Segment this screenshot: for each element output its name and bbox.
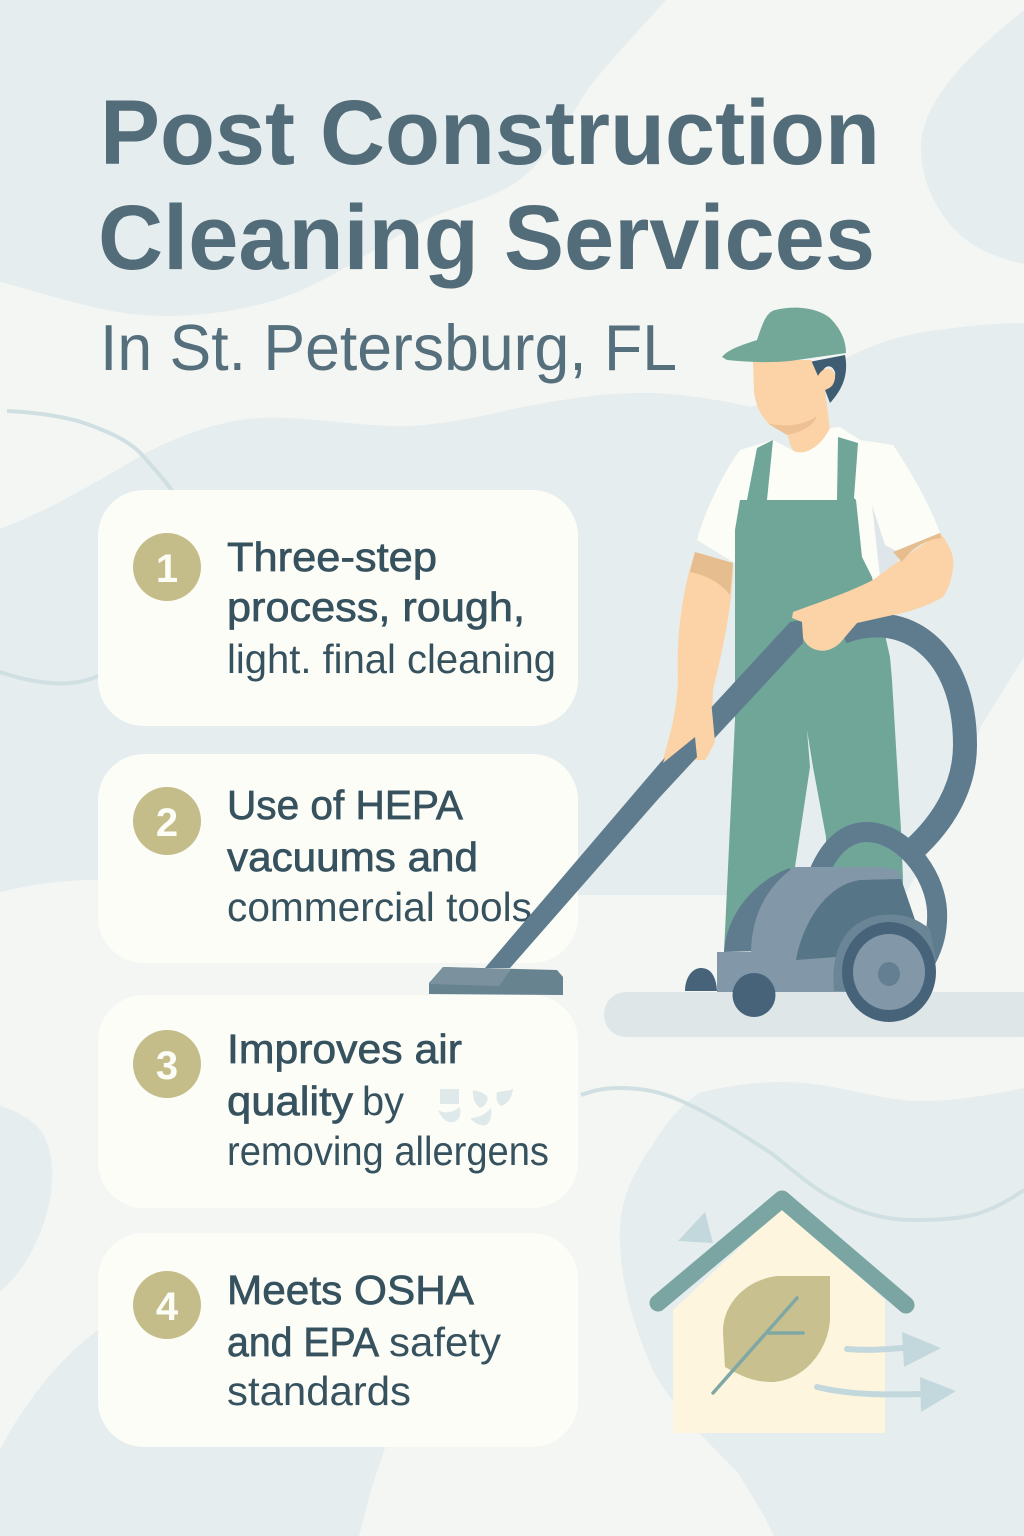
title: Cleaning Services <box>98 187 875 289</box>
illustration: house with leaf <box>658 1199 956 1433</box>
badge 4 <box>133 1271 201 1339</box>
overalls <box>724 437 903 952</box>
cap-wearing head <box>722 308 846 455</box>
text: step 1 <box>227 534 556 682</box>
text: step 1: light. final cleaning <box>227 636 556 682</box>
right arm and hand <box>792 533 953 651</box>
main wheel <box>842 922 936 1022</box>
panel: step 2 <box>98 754 578 963</box>
air arrow upper <box>847 1332 941 1367</box>
badge 1 <box>133 533 201 601</box>
panel: step 1 <box>98 490 578 726</box>
text: step 3: by <box>362 1078 404 1124</box>
house body <box>673 1208 885 1433</box>
roof <box>658 1199 906 1305</box>
title <box>98 82 880 289</box>
panel: step 3 <box>98 995 578 1208</box>
text: step 4 <box>227 1267 502 1414</box>
rear wheels <box>685 968 776 1017</box>
text: step 3: quality <box>227 1078 354 1124</box>
text: step 2: Use of HEPA <box>227 782 464 828</box>
panel: step 4 <box>98 1233 578 1447</box>
vacuum body <box>717 832 937 992</box>
text: step 4: Meets OSHA <box>227 1267 475 1313</box>
floor <box>604 992 1024 1037</box>
text: step 4: safety <box>389 1319 502 1365</box>
text: step 4: and EPA <box>227 1319 380 1365</box>
illustration: worker with vacuum <box>429 308 965 1022</box>
title: Post Construction <box>100 82 880 184</box>
text: step 1: process, rough, <box>227 584 525 630</box>
text: step 2: vacuums and <box>227 834 478 880</box>
text: step 2: commercial tools <box>227 884 532 930</box>
text: step 3 <box>227 1026 549 1174</box>
fingers over wand <box>663 700 715 763</box>
leaf <box>713 1276 830 1393</box>
vacuum hose <box>842 625 965 848</box>
badge 4: 4 <box>156 1285 179 1329</box>
vacuum floor head <box>429 967 563 995</box>
icon: faded leaves <box>438 1089 513 1125</box>
badge 1: 1 <box>156 547 178 591</box>
text: step 2 <box>227 782 532 930</box>
vacuum wand <box>485 620 803 968</box>
badge 2 <box>133 787 201 855</box>
text: step 3: removing allergens <box>227 1128 549 1174</box>
shirt <box>697 427 940 640</box>
background curved lines <box>0 411 1024 1220</box>
badge 2: 2 <box>156 801 178 845</box>
left arm <box>663 552 733 760</box>
text: step 1: Three-step <box>227 534 437 580</box>
text: step 3: Improves air <box>227 1026 462 1072</box>
badge 3: 3 <box>156 1044 178 1088</box>
air arrow lower <box>817 1377 956 1412</box>
small air arrow <box>678 1212 713 1243</box>
subtitle: In St. Petersburg, FL <box>100 311 677 384</box>
text: step 4: standards <box>227 1368 411 1414</box>
badge 3 <box>133 1030 201 1098</box>
